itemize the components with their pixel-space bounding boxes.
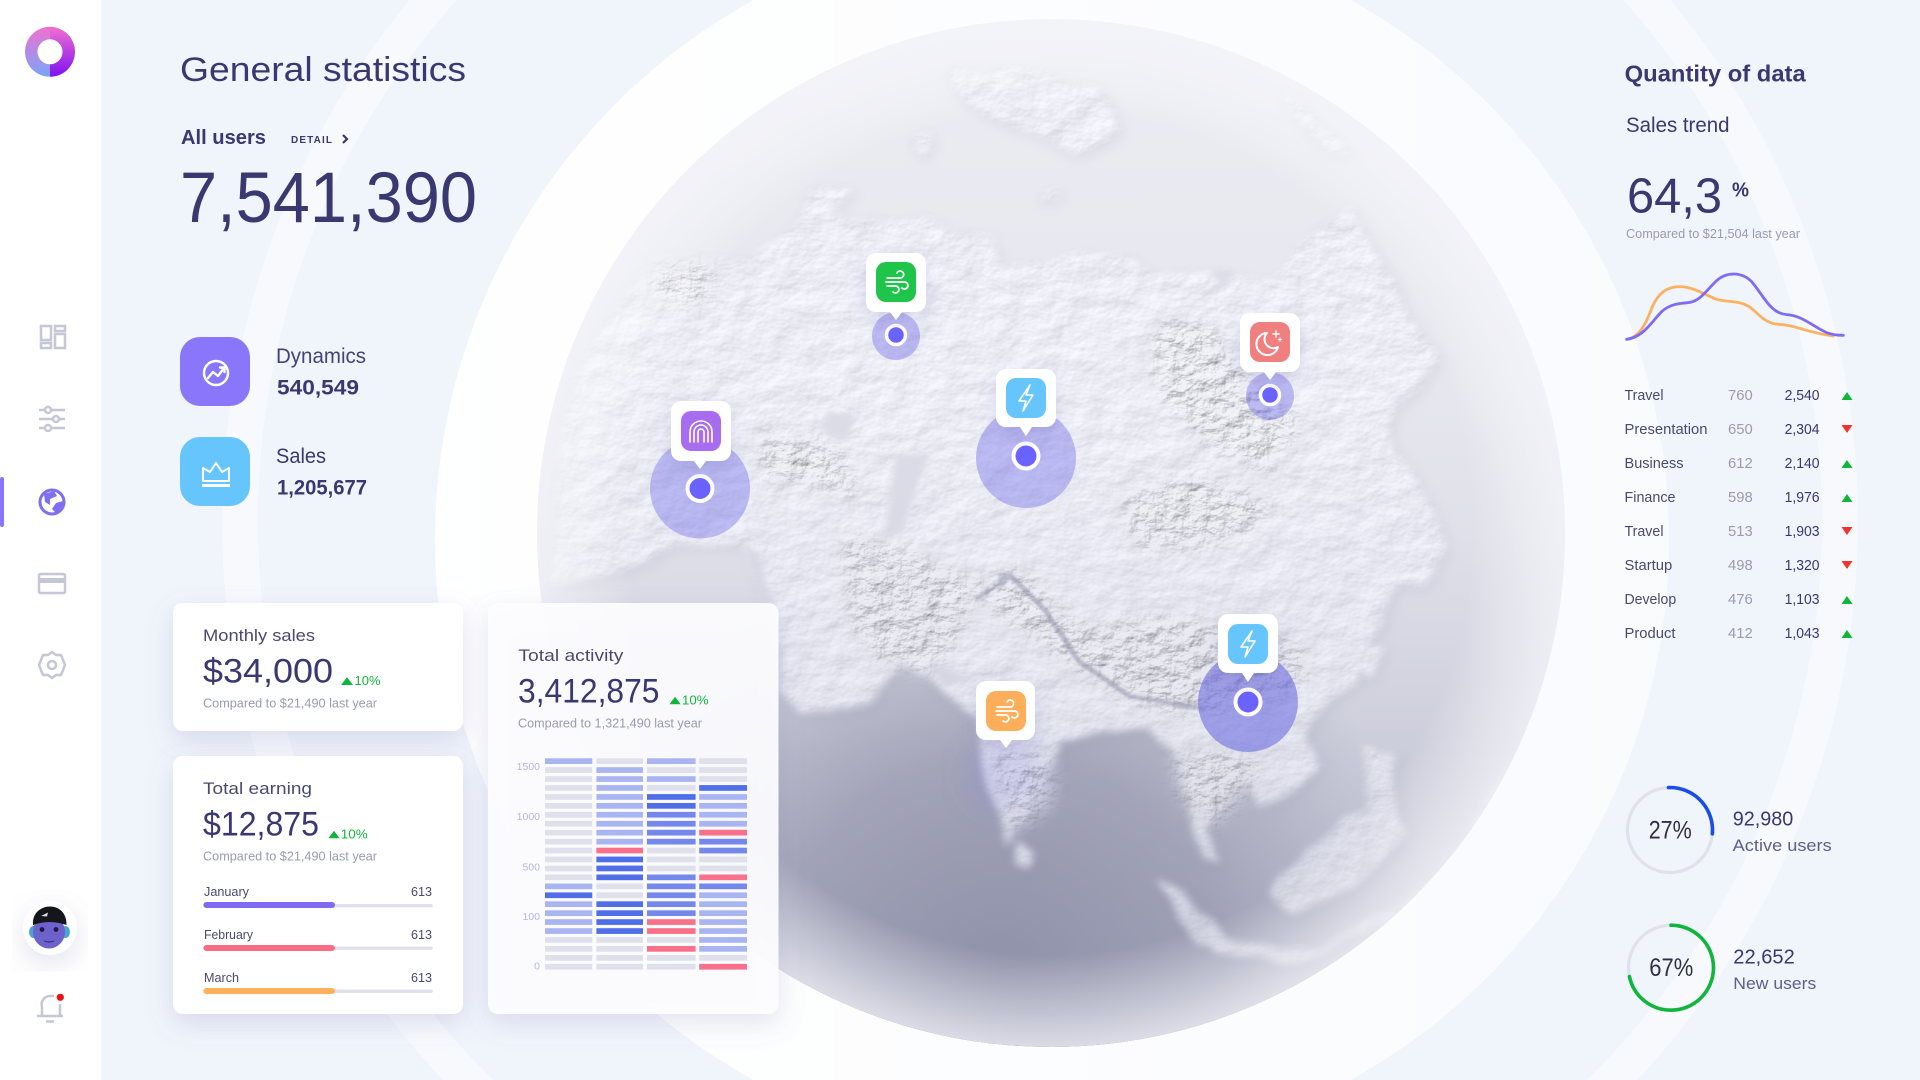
- all users heading: DETAIL: [291, 135, 332, 146]
- table row: startup: [1624, 558, 1852, 574]
- nav icon: settings gear: [39, 652, 65, 678]
- panel: monthly sales: Monthly sales: [203, 626, 315, 645]
- table row: business: Business: [1624, 456, 1684, 472]
- himalaya ridge line: [976, 575, 1205, 709]
- panel: total activity: Total activity: [518, 646, 624, 665]
- logo: [25, 27, 75, 77]
- table row: startup: 498: [1728, 558, 1753, 574]
- sales trend line chart: [1627, 274, 1843, 339]
- active nav indicator: [0, 477, 4, 527]
- heatmap axis labels: [517, 761, 540, 972]
- table row: finance: 598: [1728, 490, 1753, 506]
- sales trend value: %: [1732, 180, 1749, 202]
- table row: startup: Startup: [1624, 558, 1672, 574]
- panel: monthly sales: Compared to $21,490 last year: [203, 696, 377, 710]
- panel: total earning: [173, 756, 463, 1014]
- nav icon: globe: [40, 490, 64, 514]
- heatmap chart: [545, 758, 747, 970]
- table row: presentation: 2,304: [1785, 422, 1820, 438]
- progress bar: january: 613: [411, 885, 432, 899]
- donut: active users: [1626, 786, 1832, 874]
- map marker: fingerprint: [650, 401, 750, 538]
- table row: travel: Travel: [1624, 524, 1664, 540]
- inland seas: [742, 269, 1236, 689]
- donut: new users: [1628, 925, 1816, 1010]
- progress bar: march: 613: [411, 971, 432, 985]
- progress bar: march: [203, 971, 433, 994]
- panel: total earning: Compared to $21,490 last year: [203, 849, 377, 863]
- table row: develop: Develop: [1624, 592, 1676, 608]
- table row: product: Product: [1624, 626, 1676, 642]
- panel: total activity: 3,412,875: [518, 673, 660, 711]
- sales trend comparison note: Compared to $21,504 last year: [1626, 226, 1801, 241]
- table row: travel: 760: [1728, 388, 1753, 404]
- table row: presentation: 650: [1728, 422, 1753, 438]
- total users number: 7,541,390: [180, 159, 477, 238]
- table row: product: [1624, 626, 1852, 642]
- heatmap axis labels: 0: [534, 960, 540, 972]
- stat: dynamics: 540,549: [277, 376, 359, 400]
- halo around the globe: [435, 0, 1669, 1080]
- table row: business: [1624, 456, 1852, 472]
- table row: business: 2,140: [1785, 456, 1820, 472]
- table row: business: 612: [1728, 456, 1753, 472]
- title: General statistics: [180, 51, 466, 89]
- panel: monthly sales: 10%: [354, 674, 380, 688]
- panel: total earning: 10%: [341, 827, 368, 841]
- stat: dynamics: [180, 337, 366, 406]
- heatmap axis labels: 1000: [517, 811, 540, 823]
- donut: new users: 67%: [1649, 954, 1693, 982]
- table row: develop: 476: [1728, 592, 1753, 608]
- sales trend heading: Sales trend: [1626, 114, 1730, 137]
- progress bar: january: January: [204, 885, 250, 899]
- stat: dynamics: Dynamics: [276, 345, 366, 368]
- table row: travel: 1,903: [1785, 524, 1820, 540]
- table row: finance: 1,976: [1785, 490, 1820, 506]
- table row: travel: 513: [1728, 524, 1753, 540]
- right column heading: Quantity of data: [1625, 61, 1806, 87]
- panel: total earning: Total earning: [203, 779, 312, 798]
- donut: active users: 27%: [1649, 816, 1692, 844]
- all users heading: All users: [181, 127, 266, 149]
- map marker: lightning south: [1198, 614, 1298, 752]
- table row: develop: [1624, 592, 1852, 608]
- mountain ranges: [654, 262, 1316, 837]
- table row: develop: 1,103: [1785, 592, 1820, 608]
- table row: travel: [1624, 524, 1852, 540]
- stat: sales: 1,205,677: [277, 476, 367, 500]
- donut: new users: 22,652: [1733, 946, 1795, 968]
- stat: sales: [180, 437, 367, 506]
- all users heading: [181, 127, 347, 149]
- table row: product: 1,043: [1785, 626, 1820, 642]
- progress bar: march: March: [204, 971, 239, 985]
- map marker: moon: [1240, 313, 1300, 420]
- panel: total activity: [488, 603, 778, 1014]
- table row: finance: [1624, 490, 1852, 506]
- heatmap axis labels: 1500: [517, 761, 540, 773]
- table row: product: 412: [1728, 626, 1753, 642]
- heatmap axis labels: 100: [522, 911, 540, 923]
- progress bar: february: [203, 928, 433, 951]
- data table: [1624, 388, 1852, 642]
- donut: active users: Active users: [1733, 836, 1832, 855]
- panel: total activity: Compared to 1,321,490 last year: [518, 716, 702, 730]
- sales trend value: 64,3: [1627, 170, 1722, 224]
- nav icon: dashboard: [41, 326, 65, 348]
- donut: new users: New users: [1733, 974, 1816, 993]
- map marker: wind orange: [966, 681, 1046, 811]
- nav icon: card: [39, 574, 65, 593]
- panel: total earning: $12,875: [203, 806, 319, 844]
- progress bar: february: 613: [411, 928, 432, 942]
- progress bar: january: [203, 885, 433, 908]
- stat: sales: Sales: [276, 445, 326, 468]
- relief land masses: [555, 65, 1527, 961]
- globe shading and rim light: [778, 643, 1478, 1047]
- table row: finance: Finance: [1624, 490, 1676, 506]
- map marker: lightning: [976, 369, 1076, 508]
- globe: [530, 0, 1580, 1060]
- table row: presentation: Presentation: [1624, 422, 1708, 438]
- progress bar: february: February: [204, 928, 254, 942]
- table row: travel: 2,540: [1785, 388, 1820, 404]
- donut: active users: 92,980: [1733, 808, 1793, 830]
- heatmap axis labels: 500: [522, 862, 540, 874]
- sidebar: [0, 0, 101, 1080]
- notification bell: [37, 994, 64, 1022]
- panel: total activity: 10%: [682, 693, 708, 707]
- panel: monthly sales: [173, 603, 463, 731]
- table row: travel: Travel: [1624, 388, 1664, 404]
- table row: startup: 1,320: [1785, 558, 1820, 574]
- map marker: wind green: [866, 253, 926, 360]
- nav icon: sliders: [39, 407, 65, 431]
- table row: presentation: [1624, 422, 1852, 438]
- avatar: [23, 901, 77, 955]
- globe ocean: [537, 44, 1564, 942]
- table row: travel: [1624, 388, 1852, 404]
- panel: monthly sales: $34,000: [203, 653, 333, 691]
